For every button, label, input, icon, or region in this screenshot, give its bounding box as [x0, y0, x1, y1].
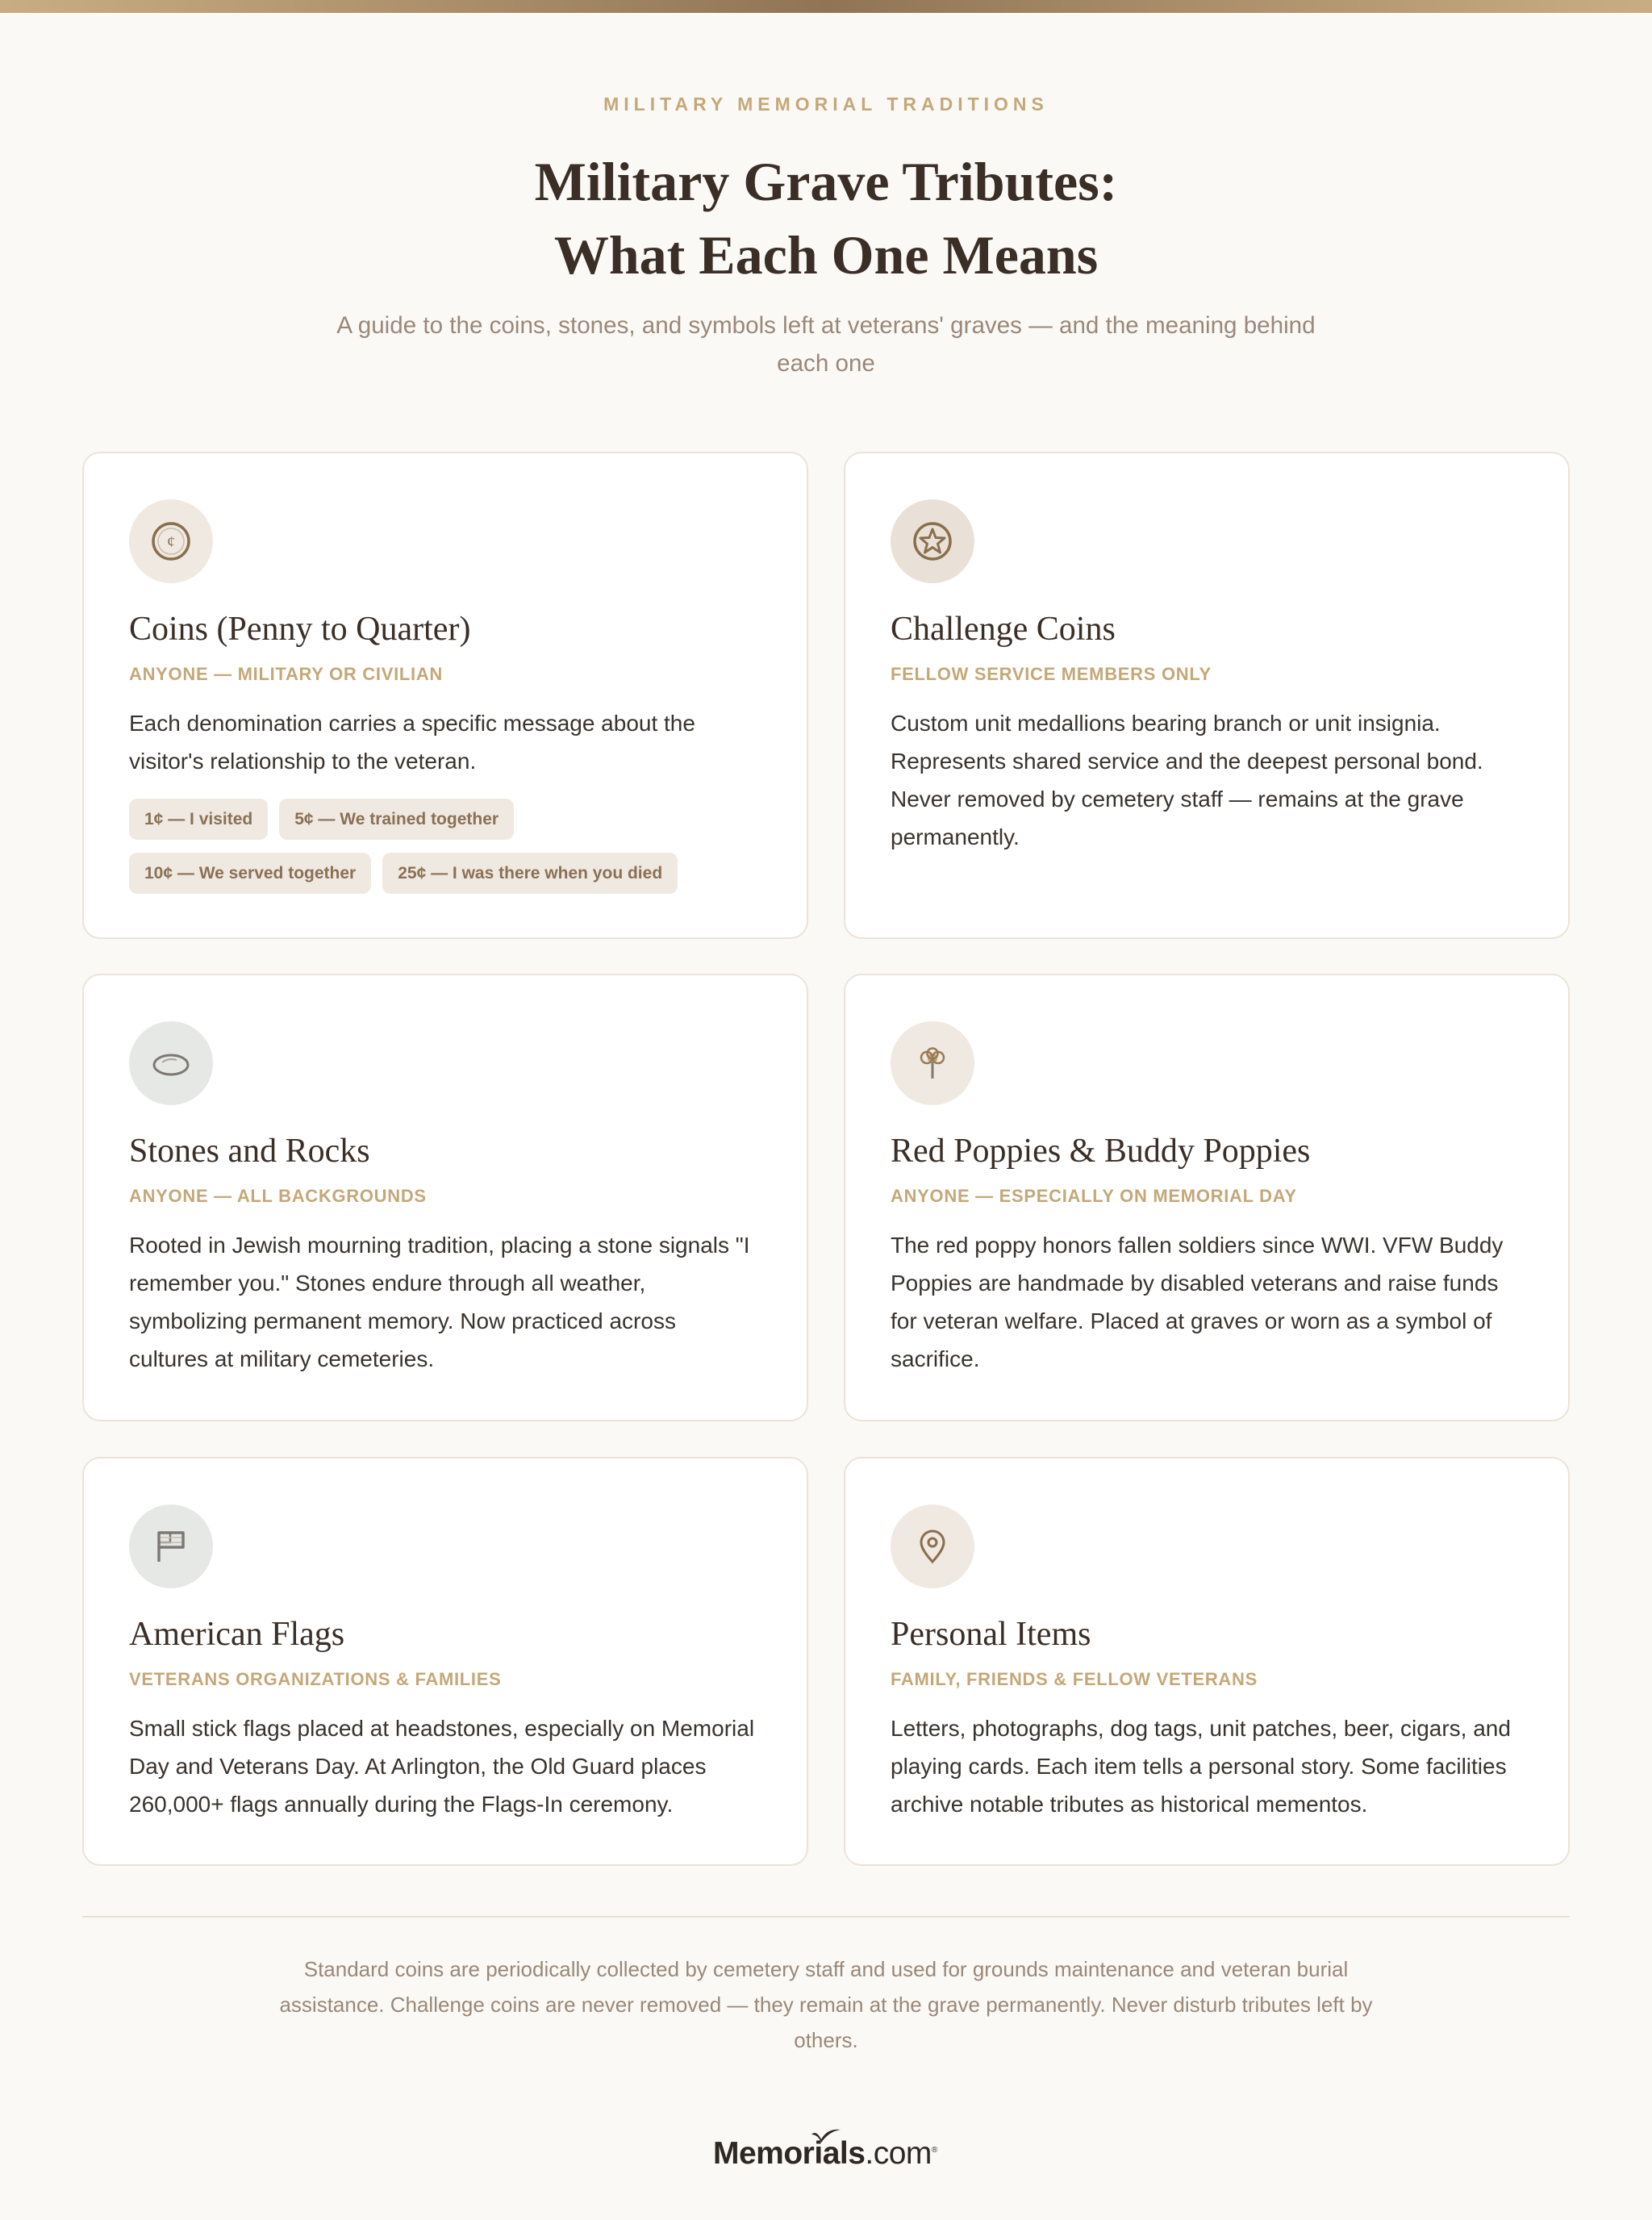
subtitle: A guide to the coins, stones, and symbols left at veterans' graves — and the meaning behind each one — [336, 312, 1316, 377]
panel: stones — [82, 974, 808, 1421]
icon: coin — [129, 499, 213, 583]
title: What Each One Means — [554, 224, 1098, 286]
panel: poppies — [844, 974, 1570, 1421]
card title: Red Poppies & Buddy Poppies — [891, 1133, 1310, 1170]
panel: coins — [82, 452, 808, 939]
icon: star coin — [891, 499, 974, 583]
tag: FELLOW SERVICE MEMBERS ONLY — [891, 664, 1212, 684]
card title: Personal Items — [891, 1616, 1091, 1653]
icon: location pin — [891, 1504, 974, 1588]
body: Letters, photographs, dog tags, unit patches, beer, cigars, and playing cards. Each item tells a personal story. Some facilities archive notable tributes as historical mementos. — [891, 1716, 1511, 1817]
body: cultures at military cemeteries. — [129, 1346, 434, 1371]
tag: ANYONE — ALL BACKGROUNDS — [129, 1186, 427, 1206]
icon: poppy — [891, 1021, 974, 1105]
card title: Coins (Penny to Quarter) — [129, 611, 470, 648]
card title: American Flags — [129, 1616, 344, 1653]
chips — [129, 799, 678, 894]
chips: 5¢ — We trained together — [294, 810, 499, 828]
logo: Memorials.com® — [713, 2136, 937, 2171]
tag: ANYONE — ESPECIALLY ON MEMORIAL DAY — [891, 1186, 1297, 1206]
eyebrow: MILITARY MEMORIAL TRADITIONS — [603, 94, 1049, 115]
body: Small stick flags placed at headstones, especially on Memorial Day and Veterans Day. At Arlington, the Old Guard places 260,000+ flags annually during the Flags-In ceremony. — [129, 1716, 754, 1817]
chips: 10¢ — We served together — [144, 864, 356, 883]
body: Rooted in Jewish mourning tradition, placing a stone signals "I remember you." Stones endure through all weather, symbolizing permanent memory. Now practiced across — [129, 1233, 749, 1333]
tag: FAMILY, FRIENDS & FELLOW VETERANS — [891, 1669, 1258, 1689]
tag: ANYONE — MILITARY OR CIVILIAN — [129, 664, 443, 684]
title — [535, 151, 1117, 286]
icon: coin: ¢ — [167, 533, 175, 551]
panel: challenge coins — [844, 452, 1570, 939]
card title: Challenge Coins — [891, 611, 1116, 648]
tag: VETERANS ORGANIZATIONS & FAMILIES — [129, 1669, 502, 1689]
card title: Stones and Rocks — [129, 1133, 370, 1170]
title: Military Grave Tributes: — [535, 151, 1117, 212]
panel: personal items — [844, 1457, 1570, 1866]
icon: stone — [129, 1021, 213, 1105]
body: The red poppy honors fallen soldiers since WWI. VFW Buddy Poppies are handmade by disabled veterans and raise funds for veteran welfare. Placed at graves or worn as a symbol of sacrifice. — [891, 1233, 1503, 1371]
chips: 1¢ — I visited — [144, 810, 252, 828]
body: Custom unit medallions bearing branch or unit insignia. Represents shared service and the deepest personal bond. Never removed by cemetery staff — remains at the grave permanently. — [891, 711, 1483, 849]
footer note: Standard coins are periodically collected by cemetery staff and used for grounds maintenance and veteran burial assistance. Challenge coins are never removed — they remain at the grave permanently. Never disturb tributes left by others. — [279, 1957, 1373, 2052]
panel: flags — [82, 1457, 808, 1866]
chips: 25¢ — I was there when you died — [398, 864, 662, 883]
icon: flag — [129, 1504, 213, 1588]
body: Each denomination carries a specific message about the visitor's relationship to the veteran. — [129, 711, 695, 774]
